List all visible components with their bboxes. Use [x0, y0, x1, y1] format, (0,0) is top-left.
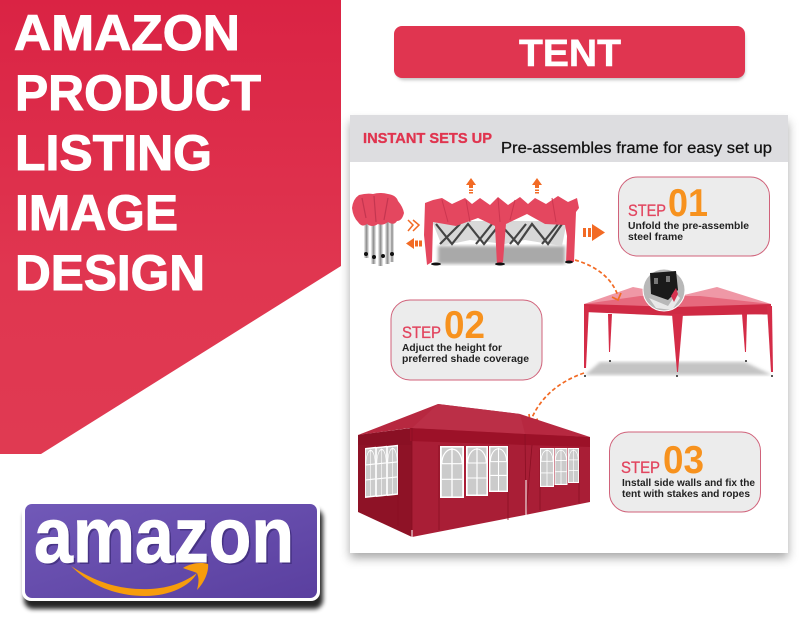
center windows	[440, 446, 508, 498]
title: amazon product listing image design: PRODUCT	[15, 65, 261, 121]
step 01 card: steel frame	[628, 231, 683, 243]
icon: up arrow left	[466, 178, 476, 194]
panel header bar	[350, 115, 788, 162]
step 02 card: Adjuct the height for	[402, 342, 502, 354]
step 02 card: 02	[444, 304, 485, 347]
tent heading button	[394, 26, 745, 80]
title: amazon product listing image design	[14, 5, 261, 301]
image: half unfolded tent frame	[424, 196, 579, 266]
title: amazon product listing image design: AMAZON	[14, 5, 240, 61]
title: amazon product listing image design: LISTING	[15, 125, 212, 181]
step 02 card: preferred shade coverage	[402, 353, 529, 365]
tent heading button: TENT	[519, 33, 621, 75]
step 01 card: Unfold the pre-assemble	[628, 220, 749, 232]
step 03 card: 03	[663, 439, 704, 482]
arrow: step 1 to step 2	[575, 260, 621, 300]
panel: product listing image	[350, 115, 788, 558]
step 02 card: STEP	[402, 323, 441, 342]
panel header bar: INSTANT SETS UP	[363, 131, 492, 147]
step 03 card	[610, 432, 760, 512]
right side windows	[540, 448, 579, 487]
icon: amazon smile arrow	[71, 563, 208, 596]
red title banner	[0, 0, 341, 454]
step 03 card: Install side walls and fix the	[622, 477, 755, 489]
title: amazon product listing image design: IMAGE	[15, 185, 178, 241]
image: enclosed red tent with walls	[358, 404, 590, 537]
panel header bar: Pre-assembles frame for easy set up	[501, 140, 772, 157]
step 01 card: STEP	[628, 201, 666, 220]
step 03 card: tent with stakes and ropes	[622, 488, 750, 500]
step 03 card: STEP	[621, 458, 660, 477]
arrow: step 2 to step 3	[529, 373, 584, 422]
step 01 card: 01	[668, 182, 708, 225]
amazon logo badge: amazon	[34, 491, 294, 579]
icon: up arrow right	[532, 178, 542, 194]
step 01 card	[618, 177, 770, 256]
icon: right arrow	[583, 224, 605, 241]
icon: right chevrons	[408, 220, 419, 231]
image: folded tent	[352, 193, 404, 266]
image: open canopy tent	[584, 269, 773, 377]
left side windows	[365, 445, 398, 498]
step 02 card	[391, 300, 542, 380]
icon: left arrow	[406, 238, 422, 249]
amazon logo badge: amazon	[36, 493, 296, 581]
detail circle: frame lock	[643, 269, 685, 311]
title: amazon product listing image design: DESIGN	[15, 245, 205, 301]
